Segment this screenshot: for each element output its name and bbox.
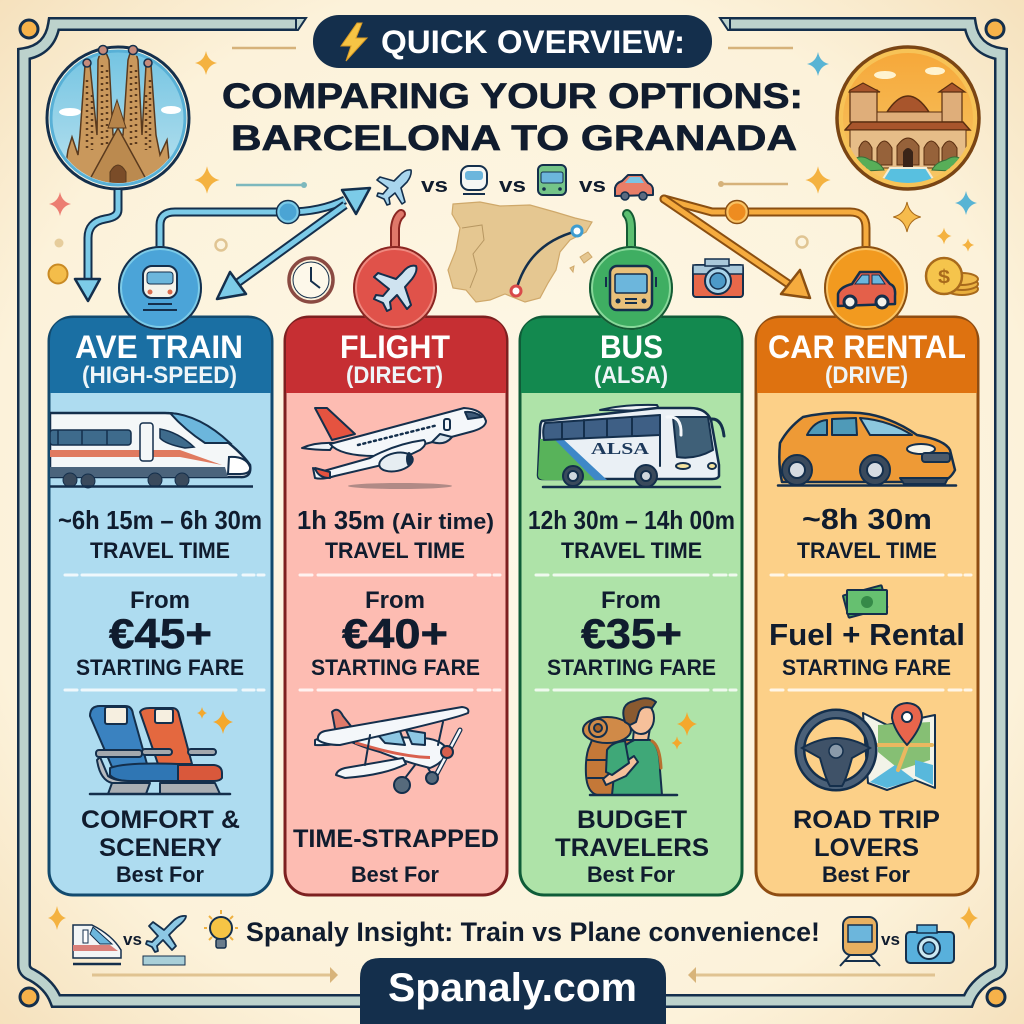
card: car rental: Fuel + Rental — [769, 617, 965, 652]
card: bus — [520, 247, 742, 895]
card: AVE train: SCENERY — [99, 834, 222, 862]
card: bus: Best For — [587, 862, 675, 887]
card: bus: BUS — [600, 329, 663, 365]
card: bus: (ALSA) — [594, 362, 668, 389]
card: AVE train: COMFORT & — [81, 806, 240, 834]
card: car rental: CAR RENTAL — [768, 329, 966, 365]
card: car rental: Best For — [822, 862, 910, 887]
comparison row: plane vs train vs bus vs car: vs — [499, 175, 526, 197]
icon: clock — [289, 258, 333, 302]
card: bus: €35+ — [581, 610, 682, 657]
card: car rental: TRAVEL TIME — [797, 538, 937, 563]
title: BARCELONA TO GRANADA — [231, 119, 797, 158]
illustration: road map — [863, 703, 935, 790]
card: car rental — [756, 247, 978, 895]
icon: small train — [461, 166, 487, 194]
card header — [757, 318, 977, 393]
footer badge: Spanaly.com — [388, 966, 637, 1010]
icon: small plane — [377, 170, 411, 205]
insight row: vs — [881, 930, 900, 949]
card: bus: From — [601, 587, 661, 614]
card: flight: €40+ — [342, 610, 448, 657]
insight row: vs — [123, 930, 142, 949]
card: AVE train: (HIGH-SPEED) — [82, 362, 237, 389]
title — [222, 77, 803, 158]
arrow: Barcelona to train card — [75, 190, 118, 301]
stem: bus connector — [627, 214, 631, 250]
footer badge — [360, 958, 666, 1024]
card: car rental: STARTING FARE — [782, 655, 951, 680]
card: flight: 1h 35m — [297, 505, 385, 535]
card: flight: TRAVEL TIME — [325, 538, 465, 563]
card: AVE train: AVE TRAIN — [75, 329, 243, 365]
comparison row: plane vs train vs bus vs car — [377, 165, 653, 205]
illustration: light aircraft — [315, 707, 468, 793]
icon: Sagrada Familia medallion — [47, 46, 189, 190]
card: bus: 12h 30m – 14h 00m — [528, 505, 735, 535]
card: car rental: ROAD TRIP — [793, 806, 940, 834]
card: bus: BUDGET — [577, 806, 687, 834]
title: COMPARING YOUR OPTIONS: — [222, 77, 803, 116]
icon: camera — [693, 259, 743, 297]
card: car rental: ~8h 30m — [802, 504, 932, 536]
card header — [50, 318, 271, 393]
badge: quick overview: QUICK OVERVIEW: — [381, 24, 685, 60]
icon: camera — [906, 925, 954, 963]
icon: Alhambra medallion — [837, 47, 979, 190]
icon: coins: $ — [938, 267, 950, 288]
illustration: train seats — [90, 706, 230, 794]
card: AVE train: TRAVEL TIME — [90, 538, 230, 563]
shadow: plane — [348, 483, 452, 489]
badge: bus — [590, 247, 672, 329]
card: AVE train — [49, 247, 272, 895]
badge: train — [119, 247, 201, 329]
card: flight: Best For — [351, 862, 439, 887]
card: flight: (DIRECT) — [346, 362, 443, 389]
card: flight: STARTING FARE — [311, 655, 480, 680]
illustration: ALSA coach — [538, 405, 724, 487]
icon: small bus — [538, 165, 566, 195]
card: flight: (Air time) — [392, 509, 494, 534]
icon: small car — [615, 175, 653, 200]
arrow: right divider — [688, 967, 935, 983]
card body — [520, 317, 742, 895]
insight row — [73, 910, 954, 983]
illustration: jet airliner — [302, 408, 486, 479]
stem: flight connector — [395, 214, 401, 250]
decorative sparkles and lines — [48, 48, 978, 930]
card: AVE train: €45+ — [109, 610, 212, 657]
card body — [756, 317, 978, 895]
map: Spain with route — [448, 202, 592, 302]
icon: light bulb — [204, 910, 238, 948]
card: flight — [285, 247, 507, 895]
card: AVE train: ~6h 15m – 6h 30m — [58, 505, 262, 535]
card: flight: From — [365, 587, 425, 614]
card: AVE train: STARTING FARE — [76, 655, 244, 680]
card: flight: TIME-STRAPPED — [293, 825, 499, 853]
arrow: train connector to vs row — [160, 188, 370, 299]
comparison row: plane vs train vs bus vs car: vs — [579, 175, 606, 197]
icon: train front — [840, 917, 880, 966]
card: bus: TRAVELERS — [555, 834, 709, 862]
illustration: orange SUV — [778, 412, 956, 486]
card: bus: TRAVEL TIME — [561, 538, 702, 563]
card: AVE train: Best For — [116, 862, 204, 887]
card: bus: STARTING FARE — [547, 655, 716, 680]
card: AVE train: From — [130, 587, 190, 614]
arrow: vs row to car card — [664, 199, 866, 298]
bus logo text: ALSA — [591, 439, 650, 458]
icon: coins — [926, 258, 978, 295]
illustration: steering wheel — [800, 714, 872, 786]
card header — [521, 318, 741, 393]
card body — [49, 317, 272, 895]
icon: lightning bolt — [341, 23, 367, 61]
insight text: Spanaly Insight: Train vs Plane convenience! — [246, 917, 820, 947]
illustration: high-speed train — [50, 413, 253, 488]
badge: car — [825, 247, 907, 329]
card header — [286, 318, 506, 393]
arrow: left divider — [92, 967, 338, 983]
badge: plane — [354, 247, 436, 329]
icon: banknotes — [843, 585, 887, 618]
icon: plane with runway — [143, 916, 186, 965]
card: flight: FLIGHT — [340, 329, 450, 365]
illustration: backpacker — [583, 698, 677, 795]
card body — [285, 317, 507, 895]
card: car rental: (DRIVE) — [825, 362, 908, 389]
badge: quick overview — [313, 15, 712, 68]
comparison row: plane vs train vs bus vs car: vs — [421, 175, 448, 197]
card: car rental: LOVERS — [814, 834, 919, 862]
icon: train — [73, 925, 121, 964]
